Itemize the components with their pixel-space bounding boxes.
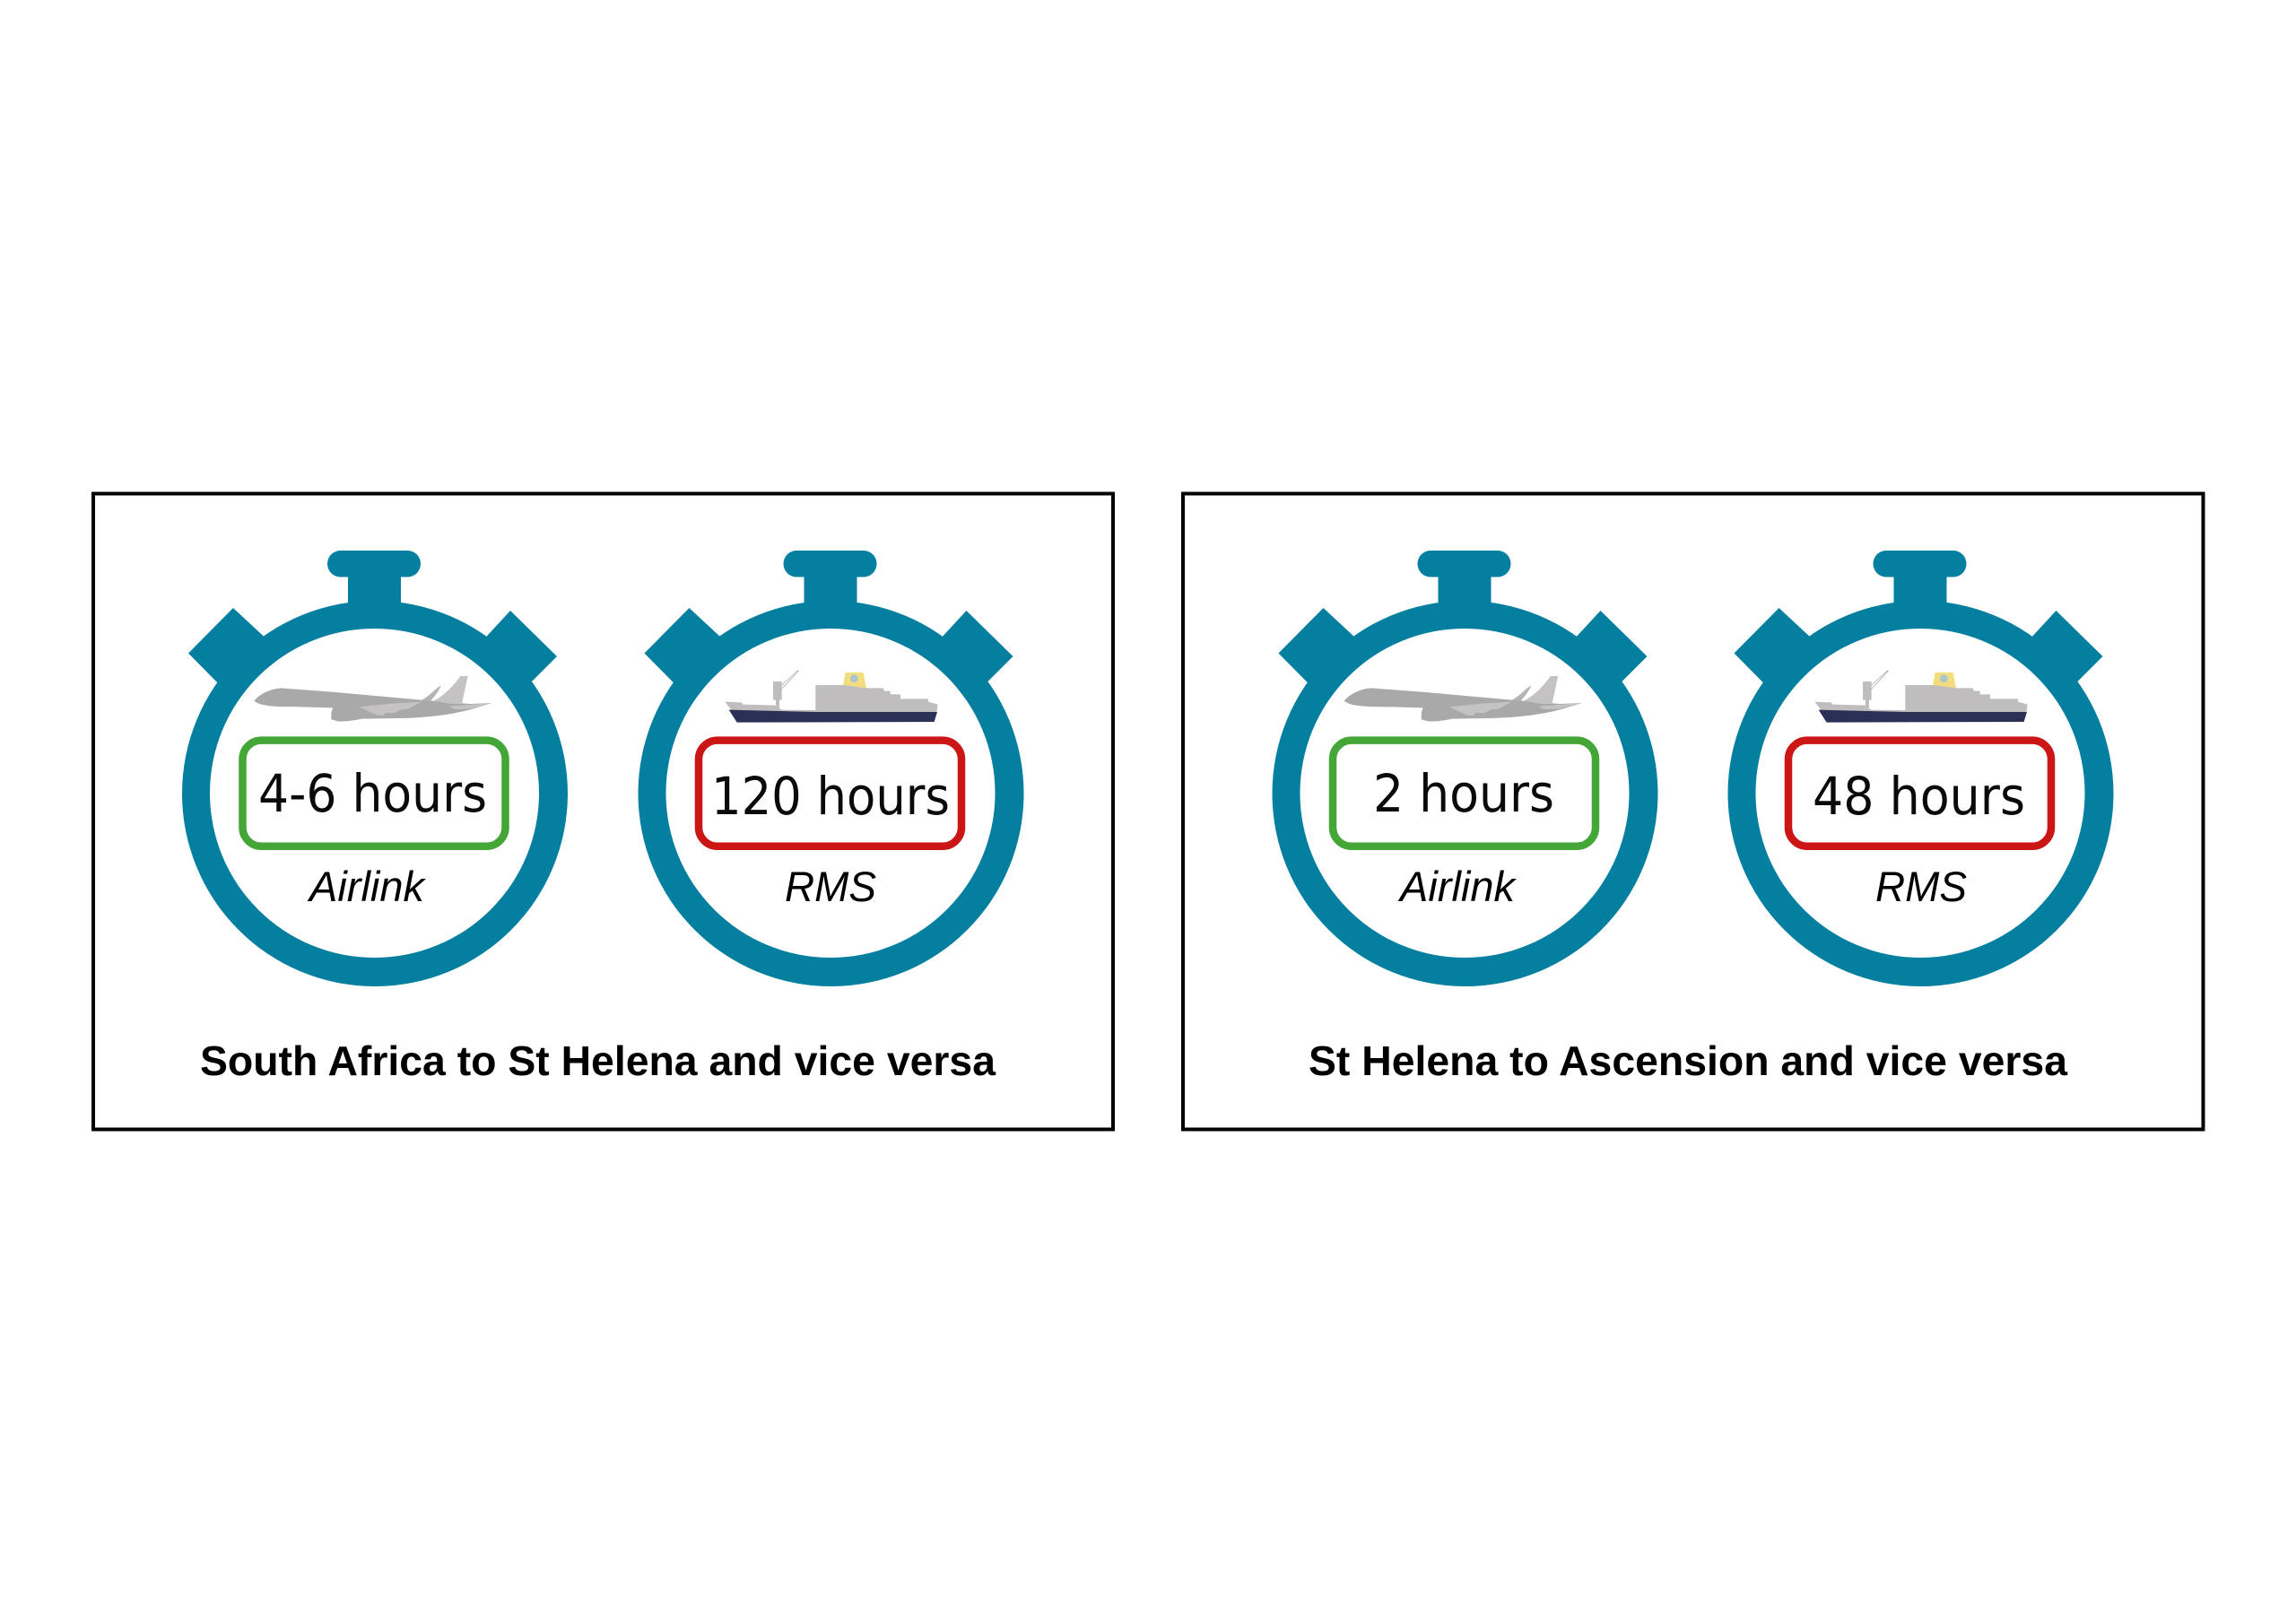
time label: 120 hours: [711, 766, 950, 827]
panel: St Helena to Ascension: [1183, 493, 2203, 1130]
icon: ship: [1814, 670, 2028, 723]
panel heading: St Helena to Ascension and vice versa: [1309, 1037, 2067, 1084]
time label: 4-6 hours: [258, 763, 487, 824]
time label: 48 hours: [1813, 766, 2025, 827]
icon: aeroplane: [254, 676, 491, 721]
stopwatch body: [639, 551, 1024, 986]
time label: 2 hours: [1373, 763, 1554, 824]
panel frame: [1183, 493, 2203, 1130]
time box: [1333, 741, 1596, 846]
icon: aeroplane: [1344, 676, 1582, 721]
panel: South Africa to St Helena: [93, 493, 1113, 1130]
time box: [1788, 741, 2051, 846]
stopwatch body: [1272, 551, 1657, 986]
icon: ship: [725, 670, 938, 723]
stopwatch body: [1727, 551, 2113, 986]
panel frame: [93, 493, 1113, 1130]
stopwatch: RMS 48 hours: [1727, 551, 2113, 986]
stopwatch: Airlink 2 hours: [1272, 551, 1657, 986]
operator label: Airlink: [307, 863, 426, 910]
time box: [242, 741, 506, 846]
operator label: Airlink: [1397, 863, 1517, 910]
time box: [699, 741, 961, 846]
operator label: RMS: [785, 863, 876, 910]
panel heading: South Africa to St Helena and vice versa: [200, 1037, 996, 1084]
stopwatch: Airlink 4-6 hours: [182, 551, 568, 986]
stopwatch: RMS 120 hours: [639, 551, 1024, 986]
operator label: RMS: [1875, 863, 1967, 910]
stopwatch body: [182, 551, 568, 986]
